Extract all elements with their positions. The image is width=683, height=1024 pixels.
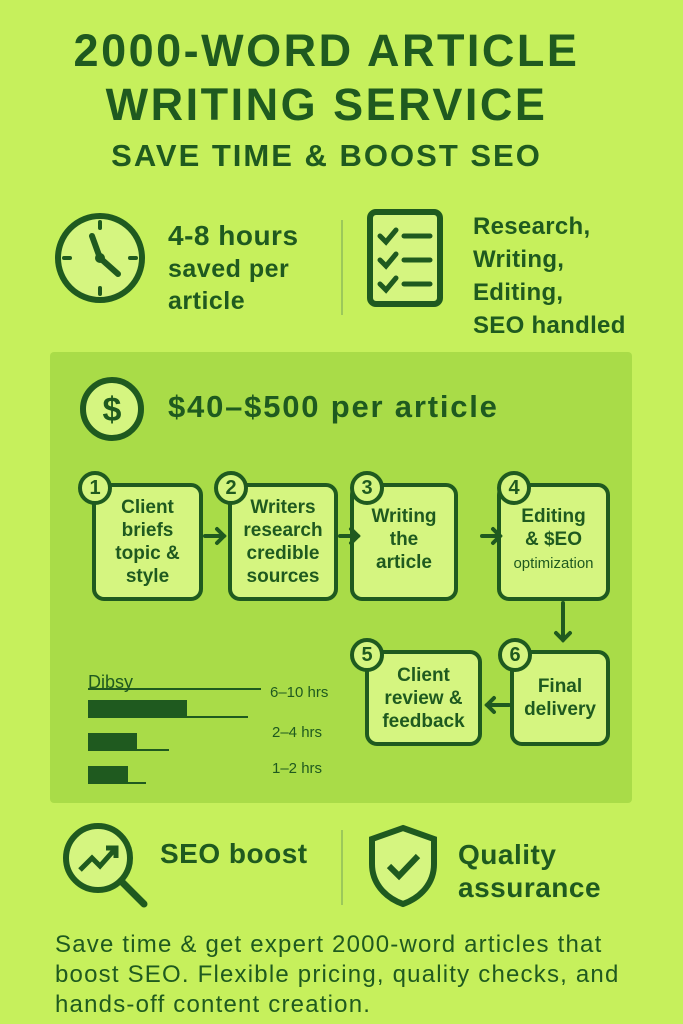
text: hours saved: saved per <box>168 255 289 283</box>
step 5 <box>365 650 482 746</box>
icon: clock <box>55 213 145 303</box>
step 2: Writers <box>250 497 316 518</box>
icon: magnifier <box>63 823 148 908</box>
text: services handled: Research, <box>473 213 590 240</box>
title: 2000-WORD ARTICLE <box>74 25 579 76</box>
step 3: the <box>390 529 418 550</box>
bar chart <box>88 672 328 784</box>
step 2 <box>228 483 338 601</box>
text: 2 <box>225 476 237 498</box>
text: services handled: SEO handled <box>473 312 626 339</box>
summary text: boost SEO. Flexible pricing, quality checks, and <box>55 961 620 988</box>
text: 5 <box>361 644 373 666</box>
step 5: review & <box>384 688 463 708</box>
text: hours saved: article <box>168 287 245 315</box>
step 2: credible <box>247 543 319 564</box>
step 3: Writing <box>371 506 437 527</box>
text: services handled: Writing, <box>473 246 564 273</box>
icon: checklist <box>367 209 443 307</box>
step numbers <box>78 471 532 672</box>
step 3: article <box>376 552 432 573</box>
price text: $40–$500 per article <box>168 389 499 424</box>
text: 4 <box>508 476 520 498</box>
summary text: hands-off content creation. <box>55 991 371 1018</box>
step 6: Final <box>538 676 582 697</box>
text: 3 <box>361 476 373 498</box>
text: quality assurance: Quality <box>458 839 556 870</box>
bar chart: 2–4 hrs <box>272 724 322 741</box>
step 6: delivery <box>524 699 596 720</box>
step 3 <box>350 483 458 601</box>
step 5: Client <box>397 664 450 686</box>
icon: dollar <box>80 377 144 441</box>
step 1 <box>92 483 203 601</box>
step 4: optimization <box>513 555 594 572</box>
text: quality assurance: assurance <box>458 872 601 903</box>
step 1: Client <box>121 497 174 518</box>
text: quality assurance <box>458 839 601 903</box>
subtitle: SAVE TIME & BOOST SEO <box>111 138 542 173</box>
text: services handled: Editing, <box>473 279 563 306</box>
icon: dollar: $ <box>103 391 122 429</box>
step 5: feedback <box>382 710 465 732</box>
text: 6 <box>509 644 521 666</box>
step 4: Editing <box>521 506 586 527</box>
step 4 <box>497 483 610 601</box>
step 2: sources <box>247 566 319 587</box>
text: services handled <box>473 213 626 339</box>
bar chart: Dibsy <box>88 672 133 692</box>
panel: pricing & process <box>50 352 632 803</box>
summary text <box>55 931 620 1018</box>
step 1: topic & <box>115 543 180 564</box>
bar chart: 1–2 hrs <box>272 760 322 777</box>
text: SEO boost: SEO boost <box>160 838 308 869</box>
title <box>74 25 579 130</box>
summary text: Save time & get expert 2000-word articles that <box>55 931 602 958</box>
step 1: style <box>126 566 169 587</box>
title: WRITING SERVICE <box>106 79 547 130</box>
icon: shield <box>369 824 437 908</box>
bar chart: 6–10 hrs <box>270 684 328 701</box>
text: 1 <box>89 476 101 498</box>
step 1: briefs <box>122 520 173 541</box>
text: hours saved <box>168 220 299 315</box>
step 6 <box>510 650 610 746</box>
text: hours saved: 4-8 hours <box>168 220 299 251</box>
step 2: research <box>243 520 323 541</box>
step 4: & $EO <box>525 529 582 550</box>
